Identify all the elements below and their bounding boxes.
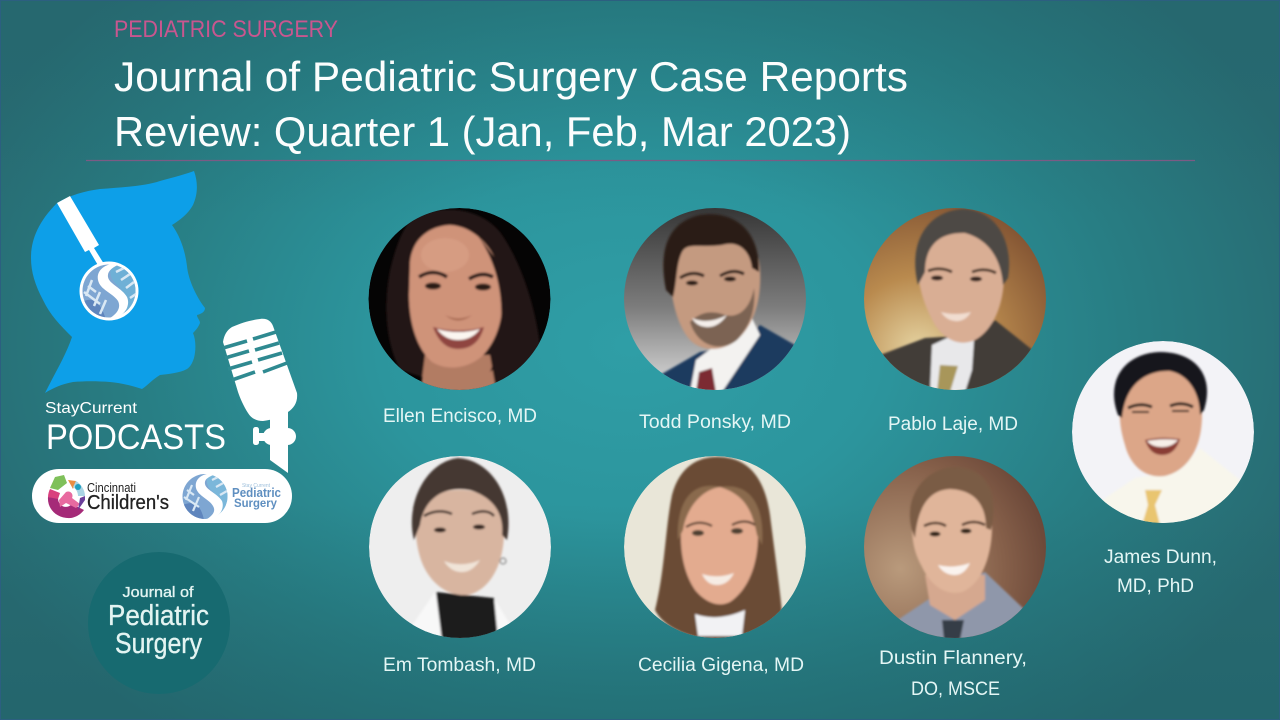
name: Pablo Laje: Pablo Laje, MD (888, 414, 1018, 435)
Cincinnati Children's wordmark: Children's (87, 491, 169, 514)
logo wordmark: PODCASTS (46, 418, 226, 457)
name: Dustin Flannery: Dustin Flannery, (879, 648, 1027, 669)
icon: StayCurrent globe (182, 473, 228, 520)
portrait: Dustin Flannery (864, 456, 1046, 645)
Pediatric Surgery wordmark (232, 483, 281, 510)
portrait: James Dunn (1072, 341, 1254, 530)
Pediatric Surgery wordmark: Stay Current (242, 483, 271, 489)
Cincinnati Children's wordmark (87, 480, 169, 514)
portrait: Cecilia Gigena (624, 456, 806, 640)
logo wordmark (45, 400, 226, 457)
icon: globe earcup (80, 262, 138, 320)
title: Journal of Pediatric Surgery Case Reports (114, 53, 908, 100)
partner logos pill (32, 469, 292, 523)
journal logo: Journal of (122, 584, 194, 601)
icon: microphone (223, 319, 297, 473)
logo wordmark: StayCurrent (45, 400, 138, 417)
journal logo: Pediatric (108, 600, 209, 632)
section label: PEDIATRIC SURGERY (114, 16, 338, 43)
name: Todd Ponsky: Todd Ponsky, MD (639, 412, 791, 433)
portrait: Em Tombash (369, 456, 551, 640)
journal logo (88, 552, 230, 694)
name: Em Tombash: Em Tombash, MD (383, 655, 536, 676)
name: Dustin Flannery: DO, MSCE (911, 679, 1000, 700)
name: Cecilia Gigena: Cecilia Gigena, MD (638, 655, 804, 676)
name: Dustin Flannery (879, 648, 1027, 700)
Pediatric Surgery wordmark: Surgery (234, 496, 277, 510)
journal logo: Surgery (115, 628, 202, 660)
portrait: Ellen Encisco (368, 208, 550, 395)
name: James Dunn: MD, PhD (1117, 576, 1194, 597)
icon: headphone band (57, 196, 104, 267)
icon: head silhouette (31, 171, 205, 393)
Pediatric Surgery wordmark: Pediatric (232, 485, 281, 500)
title (114, 53, 908, 155)
name: Ellen Encisco: Ellen Encisco, MD (383, 406, 537, 427)
portrait: Todd Ponsky (624, 208, 810, 395)
name: James Dunn: James Dunn, (1104, 547, 1217, 568)
title: Review: Quarter 1 (Jan, Feb, Mar 2023) (114, 108, 851, 155)
podcast logo (31, 171, 297, 473)
portrait: Pablo Laje (864, 208, 1046, 395)
icon: Cincinnati Children's mark (48, 475, 85, 518)
Cincinnati Children's wordmark: Cincinnati (87, 480, 136, 495)
name: James Dunn (1104, 547, 1217, 597)
